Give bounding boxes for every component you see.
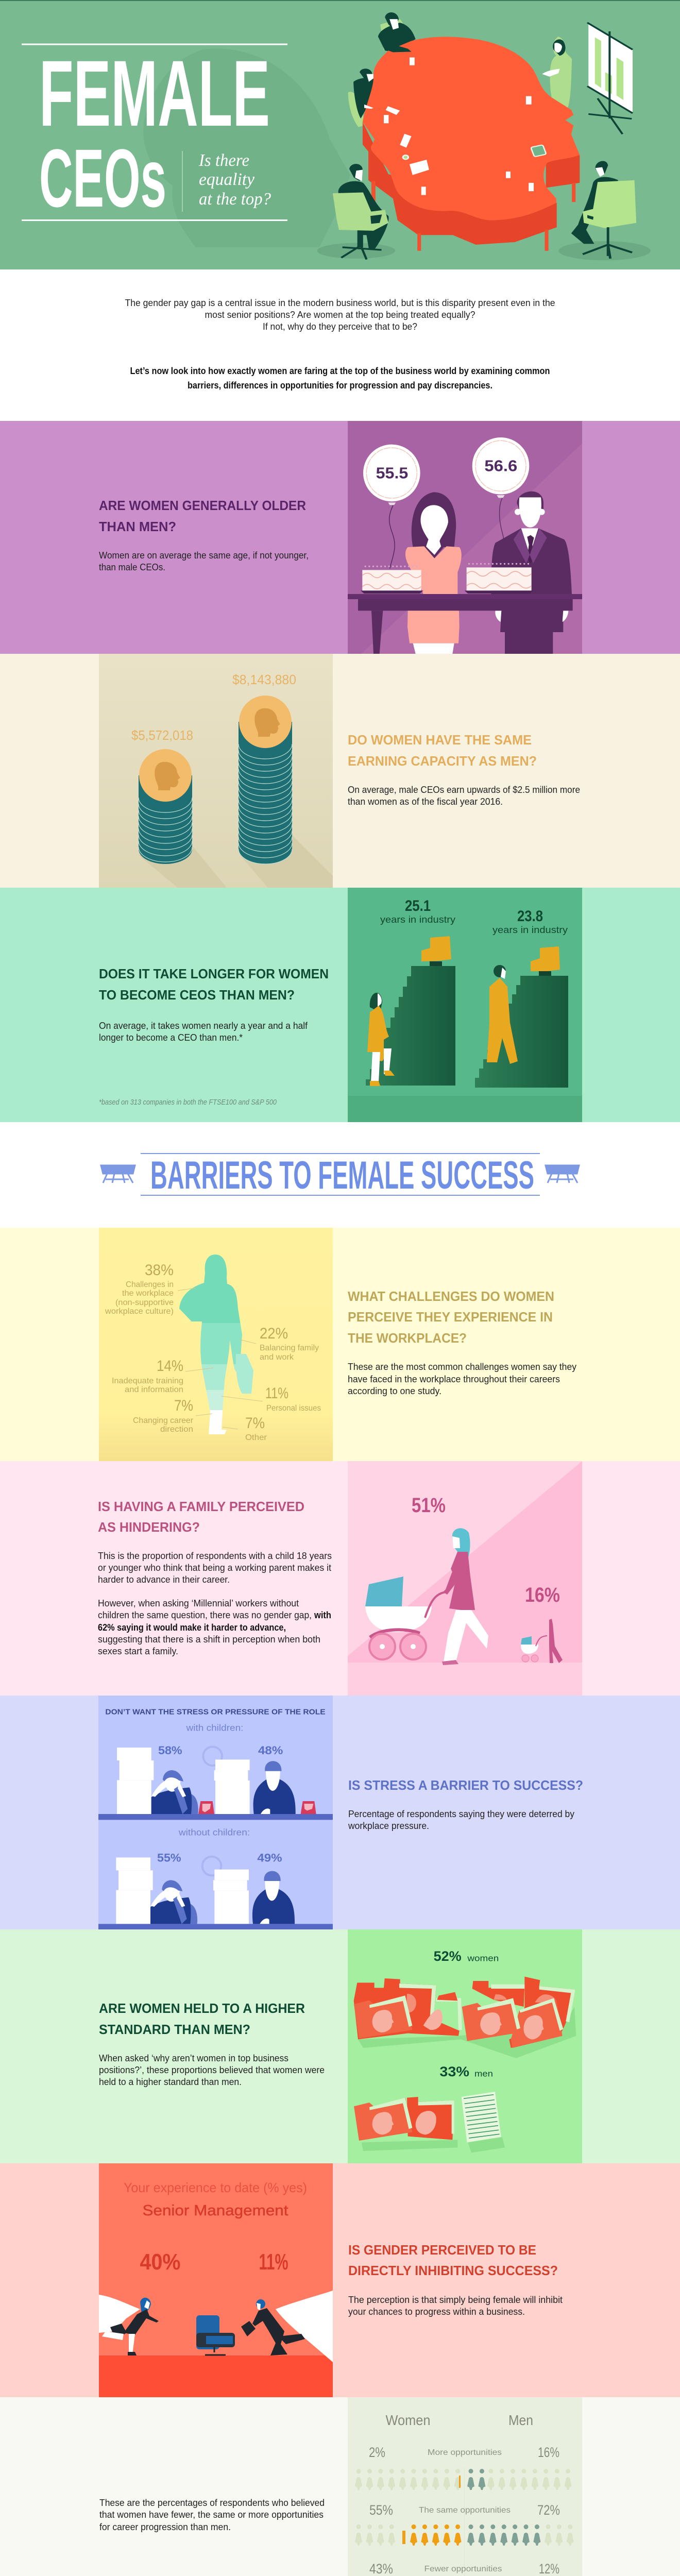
title FEMALE: FEMALE [39, 41, 270, 146]
heading: THE WORKPLACE? [348, 1330, 467, 1346]
label 11%: Personal issues [266, 1404, 321, 1413]
label 7% career: direction [160, 1425, 193, 1434]
heading [99, 966, 329, 1003]
chart subtitle: Senior Management [142, 2202, 288, 2219]
text block [99, 2498, 325, 2532]
row same opportunities: 55% [369, 2502, 393, 2518]
arm left person [364, 105, 373, 109]
row fewer opportunities [355, 2561, 574, 2576]
person top arm [386, 44, 412, 52]
label 7% other: 7% [245, 1415, 265, 1432]
legend women: Women [385, 2412, 431, 2428]
blue chair [196, 2315, 235, 2355]
subtitle: Is there [198, 151, 249, 170]
value 52%: 52% [434, 1948, 462, 1964]
seated person left [349, 164, 363, 181]
text block: suggesting that there is a shift in perception when both [98, 1634, 320, 1645]
staircase left [366, 966, 455, 1086]
heading: DO WOMEN HAVE THE SAME [348, 732, 532, 748]
text block [348, 785, 580, 807]
text block [99, 1021, 308, 1043]
desk [98, 1814, 333, 1820]
heading [98, 1499, 304, 1535]
label 11% [265, 1385, 321, 1413]
value 51%: 51% [412, 1494, 446, 1517]
value 40%: 40% [140, 2249, 180, 2275]
leader lines [178, 1288, 263, 1429]
text block: When asked ‘why aren’t women in top business [99, 2053, 288, 2063]
desk signs [198, 1801, 316, 1814]
heading [348, 1289, 554, 1346]
panel: family [0, 1461, 680, 1696]
text block: longer to become a CEO than men.* [99, 1032, 243, 1043]
chair left [421, 936, 451, 961]
text block [99, 550, 309, 572]
value 49%: 49% [257, 1852, 282, 1865]
row more opportunities: 16% [538, 2445, 559, 2460]
hero banner [0, 0, 680, 269]
icon: road barrier left [101, 1165, 135, 1183]
table objects [384, 58, 534, 195]
heading: IS STRESS A BARRIER TO SUCCESS? [348, 1777, 583, 1793]
label 14%: and information [125, 1385, 183, 1394]
heading: AS HINDERING? [98, 1519, 200, 1535]
text block: workplace pressure. [348, 1821, 429, 1831]
faint head shadow [143, 48, 350, 247]
label 14%: Inadequate training [112, 1377, 183, 1385]
row more opportunities: More opportunities [428, 2448, 502, 2457]
bold lead paragraph: barriers, differences in opportunities for progression and pay discrepancies. [188, 380, 492, 391]
text block: However, when asking ‘Millennial’ workers without [98, 1598, 299, 1608]
text block: harder to advance in their career. [98, 1574, 230, 1585]
value 48%: 48% [258, 1744, 283, 1757]
text block: your chances to progress within a business. [348, 2307, 525, 2317]
text block: children the same question, there was no gender gap, [98, 1610, 312, 1620]
illustration: mother with pram [348, 1461, 582, 1696]
heading: IS GENDER PERCEIVED TO BE [348, 2242, 536, 2258]
text block [348, 1809, 574, 1831]
label 38%: workplace culture) [105, 1307, 174, 1316]
label with children: with children: [185, 1722, 243, 1733]
staircase right [475, 976, 568, 1088]
standing woman [550, 37, 572, 108]
heading: DOES IT TAKE LONGER FOR WOMEN [99, 966, 329, 981]
panel: gender perceived [0, 2163, 680, 2397]
chart: opportunities pictogram [348, 2397, 582, 2576]
label 14% [112, 1358, 183, 1394]
woman running [102, 2298, 159, 2355]
value men: 23.8 [517, 908, 543, 925]
heading [99, 2001, 305, 2037]
label 22%: 22% [260, 1325, 288, 1342]
mother large [442, 1528, 488, 1665]
intro paragraph: The gender pay gap is a central issue in the modern business world, but is this disparity present even in the [125, 298, 555, 308]
heading: barriers to female success [101, 1153, 579, 1197]
label 7% career [133, 1397, 194, 1434]
flipchart [588, 24, 633, 113]
heading: TO BECOME CEOS THAN MEN? [99, 987, 295, 1003]
person left [348, 92, 364, 127]
text block [348, 1362, 576, 1396]
text block [348, 2295, 563, 2317]
panel: earnings [0, 654, 680, 888]
footnote: *based on 313 companies in both the FTSE100 and S&P 500 [99, 1098, 277, 1107]
heading: PERCEIVE THEY EXPERIENCE IN [348, 1309, 553, 1325]
label 7% career: 7% [174, 1397, 193, 1414]
handbag [236, 1354, 253, 1394]
table [348, 594, 582, 599]
man climbing [487, 965, 518, 1064]
text block: according to one study. [348, 1386, 441, 1396]
row same opportunities [355, 2502, 574, 2546]
text block: These are the most common challenges women say they [348, 1362, 576, 1372]
panel: opportunities [0, 2397, 680, 2576]
text block: with [314, 1610, 331, 1620]
value men: $8,143,880 [232, 672, 296, 687]
label 7% other [245, 1415, 267, 1442]
panel: age [0, 421, 680, 654]
age 56.6: 56.6 [484, 457, 517, 474]
value women: 25.1 [405, 897, 431, 914]
label 38%: 38% [145, 1262, 174, 1279]
label 7% other: Other [245, 1433, 267, 1442]
label 14%: 14% [157, 1358, 183, 1375]
heading: IS HAVING A FAMILY PERCEIVED [98, 1499, 304, 1514]
bold lead paragraph: Let’s now look into how exactly women are faring at the top of the business world by examining common [130, 366, 550, 376]
coin shadows [139, 835, 333, 888]
giant hand left [99, 2295, 140, 2333]
person top [380, 19, 409, 50]
label women: years in industry [380, 914, 455, 925]
illustration: CV folders [348, 1929, 582, 2163]
coin stack men [239, 696, 292, 864]
intro paragraph: most senior positions? Are women at the top being treated equally? [205, 310, 475, 320]
illustration: staircases [348, 888, 582, 1122]
value 55%: 55% [157, 1852, 181, 1865]
workers with children [117, 1747, 296, 1814]
man running [241, 2299, 305, 2355]
divider [182, 151, 183, 212]
heading: EARNING CAPACITY AS MEN? [348, 753, 537, 769]
row more opportunities [355, 2445, 572, 2490]
heading [348, 732, 537, 769]
subtitle: at the top? [199, 190, 271, 209]
faded heads behind [406, 1994, 556, 2012]
text block: or younger who think that being a working parent makes it [98, 1563, 331, 1573]
subtitle: equality [199, 170, 255, 189]
text block: These are the percentages of respondents who believed [99, 2498, 325, 2508]
bold lead paragraph [130, 366, 550, 391]
title CEOs: CEOs [39, 132, 166, 224]
text block: for career progression than men. [99, 2522, 231, 2532]
title rule top [22, 43, 287, 45]
label 22%: and work [260, 1353, 294, 1362]
heading: THAN MEN? [99, 519, 176, 534]
value 11%: 11% [259, 2249, 288, 2275]
heading: ARE WOMEN HELD TO A HIGHER [99, 2001, 305, 2016]
pram small [521, 1636, 547, 1662]
label women: women [467, 1953, 499, 1963]
heading [348, 2242, 558, 2278]
label men: men [474, 2069, 493, 2078]
coin stack women [139, 749, 192, 864]
value 16%: 16% [525, 1584, 560, 1606]
illustration: head-shaped boardroom table [317, 12, 651, 260]
legend men: Men [508, 2412, 533, 2428]
desk [98, 1924, 333, 1929]
heading [99, 498, 306, 534]
woman silhouette chart [175, 1252, 263, 1436]
panel: challenges [0, 1228, 680, 1461]
label men: years in industry [492, 925, 568, 935]
text block: positions?’, these proportions believed that women were [99, 2065, 325, 2075]
chair shadows [317, 243, 395, 259]
text block: 62% saying it would make it harder to advance, [98, 1622, 286, 1633]
woman [412, 492, 456, 547]
table top [363, 37, 580, 221]
label 22%: Balancing family [260, 1344, 319, 1352]
row more opportunities: 2% [369, 2445, 385, 2460]
title: DON’T WANT THE STRESS OR PRESSURE OF THE ROLE [105, 1708, 326, 1717]
text block: Percentage of respondents saying they were deterred by [348, 1809, 574, 1819]
age 55.5: 55.5 [376, 465, 408, 482]
text block: that women have fewer, the same or more opportunities [99, 2510, 324, 2520]
folders men [354, 2097, 454, 2141]
label without children: without children: [178, 1827, 250, 1838]
intro paragraph: If not, why do they perceive that to be? [263, 321, 417, 332]
row fewer opportunities: Fewer opportunities [424, 2565, 502, 2573]
value 33%: 33% [439, 2064, 469, 2079]
text block: The perception is that simply being female will inhibit [348, 2295, 563, 2305]
text block [99, 2053, 325, 2087]
panel: higher standard [0, 1929, 680, 2163]
label 38%: the workplace [122, 1289, 174, 1298]
pram large [365, 1577, 448, 1659]
man [491, 528, 572, 595]
value women: $5,572,018 [131, 727, 193, 743]
mother small [549, 1619, 563, 1663]
illustration: birthday cakes and balloons [348, 421, 582, 654]
value 58%: 58% [158, 1744, 182, 1757]
intro paragraph [125, 298, 555, 332]
folders women [354, 1977, 575, 2048]
text block: This is the proportion of respondents with a child 18 years [98, 1551, 332, 1561]
woman climbing [367, 993, 395, 1086]
CV document [462, 2092, 501, 2142]
panel: time to CEO [0, 888, 680, 1122]
panel: stress [0, 1696, 680, 1929]
table side [363, 122, 580, 245]
text block: than women as of the fiscal year 2016. [348, 796, 503, 807]
label 22% [260, 1325, 319, 1362]
text block: sexes start a family. [98, 1646, 178, 1656]
seated person right [596, 161, 608, 176]
text block: have faced in the workplace throughout their careers [348, 1374, 560, 1384]
chart title: Your experience to date (% yes) [124, 2180, 307, 2195]
text block: On average, male CEOs earn upwards of $2.5 million more [348, 785, 580, 795]
cakes [365, 564, 420, 569]
text block: On average, it takes women nearly a year and a half [99, 1021, 308, 1031]
label 38%: (non-supportive [115, 1298, 174, 1307]
heading: STANDARD THAN MEN? [99, 2022, 250, 2037]
text block: than male CEOs. [99, 562, 165, 572]
workers without children [116, 1857, 295, 1924]
illustration: stressed workers [98, 1696, 333, 1929]
heading: DIRECTLY INHIBITING SUCCESS? [348, 2263, 558, 2278]
title rule bottom [22, 219, 287, 221]
label 38%: Challenges in [126, 1280, 174, 1289]
heading: WHAT CHALLENGES DO WOMEN [348, 1289, 554, 1304]
illustration: race to the chair [99, 2163, 333, 2397]
heading: ARE WOMEN GENERALLY OLDER [99, 498, 306, 513]
giant hand right [276, 2291, 333, 2362]
label 11%: 11% [265, 1385, 288, 1402]
text block [98, 1551, 332, 1656]
chair right [531, 946, 560, 971]
row same opportunities: The same opportunities [419, 2506, 511, 2515]
label 7% career: Changing career [133, 1416, 194, 1425]
balloons [389, 505, 395, 569]
label 38% [105, 1262, 174, 1316]
text block: held to a higher standard than men. [99, 2077, 242, 2087]
icon: road barrier right [546, 1165, 579, 1183]
row same opportunities: 72% [537, 2502, 560, 2518]
subtitle [198, 151, 271, 209]
text block: Women are on average the same age, if not younger, [99, 550, 309, 561]
